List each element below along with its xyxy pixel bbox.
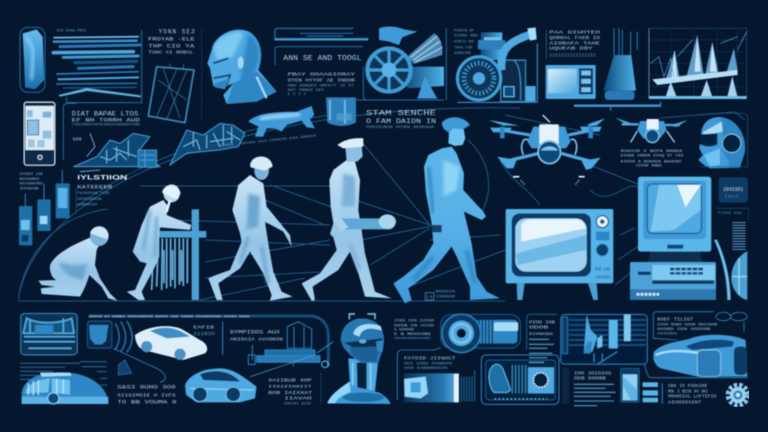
bottom row left: vehicles: DYMPIDDS AUX bbox=[230, 329, 281, 336]
antenna brackets bbox=[349, 314, 375, 319]
text block: top centre-left notes: TUNC AI NDBAL bbox=[148, 49, 194, 55]
bottom row right: lens and panels bbox=[394, 312, 748, 406]
bus shape bbox=[22, 372, 108, 404]
bottom row right: lens and panels: E B MOHIOBS bbox=[394, 333, 432, 337]
bottom row right: lens and panels: AIHOIDAINT bbox=[668, 399, 702, 405]
panel: waveform landscape bbox=[53, 28, 142, 103]
stacked drawers bbox=[643, 382, 658, 402]
heading: STAM SENCHE: STAM SENCHE bbox=[366, 110, 437, 118]
text block and side gauges left: BOGNRD bbox=[19, 178, 41, 182]
arms bbox=[500, 130, 593, 135]
wheel bbox=[367, 48, 411, 92]
wave bands bbox=[53, 37, 140, 88]
blue car bbox=[185, 368, 257, 402]
text block: drone notes: ROKOUR Z BEPA MANDA bbox=[621, 150, 683, 154]
device: retro television bbox=[506, 209, 613, 300]
frame bbox=[397, 348, 441, 400]
machinery bbox=[248, 322, 333, 367]
text: IOBS ODN SIDNR bbox=[394, 320, 435, 324]
bottom row left: vehicles: ANIOAIA AVADKOK bbox=[230, 336, 284, 342]
heading: EVOLUTION: HDDSOUK bbox=[77, 198, 104, 202]
panel: AM SE AND TOOL: ADY OMNER DDT bbox=[288, 88, 324, 92]
small label at feet: IOBNSDR bbox=[436, 295, 456, 299]
pipe bbox=[501, 34, 532, 70]
panel: AM SE AND TOOL bbox=[275, 28, 368, 100]
heading: STAM SENCHE: DSMINIBON SPORK BENRAGB bbox=[366, 126, 435, 130]
centre panel bbox=[481, 355, 559, 404]
small label at feet bbox=[425, 291, 456, 300]
body text: PBAY OOAAGIORAY bbox=[288, 71, 355, 77]
illustration: small drone bbox=[615, 118, 687, 143]
bottom row left: vehicles bbox=[20, 313, 333, 407]
text block and side gauges left bbox=[19, 170, 70, 245]
bottom row right: lens and panels: OOH EHBNBHSON bbox=[404, 367, 447, 371]
illustration: engine turbine bbox=[454, 27, 537, 102]
bottom row right: lens and panels: DDSB ON HIOD bbox=[394, 325, 435, 329]
panel: prisms bbox=[561, 314, 647, 364]
bottom row right: lens and panels: DDS IDBH IDNBHOR bbox=[404, 362, 453, 366]
lens unit bbox=[441, 314, 521, 353]
text block: top right notes: IIIIIIIIIIIIIIII bbox=[549, 53, 596, 59]
visor and jaw bbox=[344, 338, 383, 347]
illustration: VR helmet head bbox=[698, 113, 748, 168]
heading: STAM SENCHE bbox=[366, 110, 437, 130]
figure: robot bust bbox=[327, 314, 391, 404]
smoke bbox=[379, 26, 417, 45]
notes: PUMAIB BP bbox=[454, 30, 474, 34]
face bbox=[448, 127, 465, 146]
micro text bbox=[20, 362, 107, 385]
panel: top right text: HOSBD ODN HSODNB bbox=[657, 328, 712, 332]
illustration: prehistoric animal bbox=[248, 106, 315, 137]
panel: top right text: OIDH NOBS HODB SNIOHDB bbox=[657, 324, 718, 328]
bottom row right: lens and panels: DIHNOBS bbox=[529, 333, 554, 337]
heading: EVOLUTION bbox=[76, 174, 128, 213]
neck bbox=[348, 358, 378, 392]
panel: right side widgets: (DSIID) bbox=[723, 187, 743, 193]
panel: AM SE AND TOOL: NONE bbox=[288, 92, 306, 96]
text block: drone notes bbox=[621, 150, 684, 169]
fan wheel bbox=[457, 57, 501, 100]
bottom row right: lens and panels: ODB DOOBB bbox=[574, 376, 606, 382]
text block: top centre-left notes: THP CIO YA bbox=[148, 43, 195, 49]
text block: drone notes: DIKBA INNDK EXOQ XT TAS bbox=[621, 154, 684, 158]
notes: S&S3 9UHO 3O0 bbox=[117, 385, 176, 391]
illustration: ancient ruins bbox=[73, 123, 245, 172]
panel: crystal specimen bbox=[20, 27, 45, 92]
spikes bbox=[666, 35, 738, 80]
barrel bbox=[404, 67, 444, 88]
heading: EVOLUTION: IYLSTIION bbox=[77, 174, 128, 181]
frame and roof bbox=[67, 30, 142, 103]
heading: FATOID JIINHCT bbox=[404, 356, 456, 362]
sports car bbox=[645, 335, 748, 378]
bottom row left: vehicles: SIISIMOIE H IVFS bbox=[117, 392, 176, 398]
caption along arc: HBNNED - AHHIREB DOLD CTBONIOM EHEB AOBNNIN bbox=[220, 134, 316, 148]
figure: human carrying log bbox=[302, 138, 396, 301]
small label at feet: BNODIN bbox=[436, 291, 455, 295]
bottom row left: vehicles: IIAVAO bbox=[284, 396, 312, 402]
figure: walking human with helmet bbox=[208, 156, 293, 301]
shoulders bbox=[327, 382, 391, 404]
text block: drone notes: IDIAR SNBS bbox=[636, 165, 662, 169]
bottom row right: lens and panels: ONDIBHSOBNIDHOBS bbox=[394, 337, 431, 340]
illustration: engine turbine: SIDRWY NBB bbox=[454, 35, 478, 39]
device: small monitor bbox=[546, 65, 596, 99]
text block: drone notes: KIDSR A BOKRDA BAHUNS bbox=[621, 160, 682, 164]
knobs bbox=[596, 216, 608, 228]
panel: top right text bbox=[653, 312, 747, 340]
text block: top right notes: AIOBAFA TAHE bbox=[549, 41, 600, 47]
panel: right side widgets: TNUU bbox=[725, 195, 738, 199]
centre text: PIOD IOB bbox=[529, 319, 555, 325]
figure: modern man walking bbox=[393, 117, 500, 303]
text block: top centre-left notes: YONN SE3 bbox=[159, 28, 195, 35]
panel: top right text: OHDBS bbox=[657, 331, 677, 335]
signal box bbox=[87, 321, 112, 348]
text block: top centre-left notes: FROYAB -ELE bbox=[148, 37, 195, 43]
helmet bbox=[341, 318, 384, 363]
text block and side gauges left: OIDSHT IOB bbox=[19, 173, 44, 177]
illustration: bald bearded head bbox=[207, 30, 277, 104]
panel: top right text: BOEF TILIGT bbox=[657, 317, 693, 323]
text block: panel left of ruins: 500 bbox=[73, 137, 82, 143]
illustration: engine turbine: AOMIDB bbox=[454, 52, 472, 56]
bottom row right: lens and panels: A SOHOHD bbox=[394, 329, 415, 333]
panel: AM SE AND TOOL: OTEN HYTOF AE INDOB bbox=[288, 78, 355, 83]
text block: top right notes: QOBRAL FAEB IO bbox=[549, 35, 600, 41]
panel: right side widgets: PIRAN SAB bbox=[718, 211, 741, 215]
device: smartphone bbox=[24, 102, 55, 165]
caption: SIN RANG PRES bbox=[57, 28, 86, 32]
cylinder bbox=[481, 32, 502, 60]
stand bbox=[417, 76, 437, 99]
globe dome bbox=[731, 251, 747, 300]
bottom row left: vehicles: 21IBID bbox=[193, 331, 215, 337]
car notes: EAFIB bbox=[193, 324, 214, 330]
illustration: large drone bbox=[488, 115, 605, 185]
text block: top right notes: PAA DIUHTEH bbox=[549, 30, 600, 36]
small label at feet: OB bbox=[427, 296, 433, 300]
text block: top centre-left notes bbox=[148, 28, 195, 55]
text block: panel left of ruins: EF BH TORRH AUD bbox=[72, 117, 140, 123]
legs bbox=[517, 283, 598, 300]
text block and side gauges left: HOIBNORD bbox=[19, 183, 44, 187]
diagram: wire net frame bbox=[148, 30, 202, 123]
icon: gear bbox=[728, 385, 748, 405]
rotors bbox=[488, 118, 605, 170]
device: desktop monitor and base unit bbox=[630, 177, 716, 300]
robed body bbox=[127, 200, 191, 300]
illustration: engine turbine: OUNDIS HNR bbox=[454, 41, 475, 45]
illustration: canister bbox=[326, 97, 356, 126]
text block: top right notes: UQUEAB DBY bbox=[549, 46, 593, 52]
illustration: steam wheel and cannon bbox=[354, 26, 446, 100]
text block: panel left of ruins: DIAT BAPAE LTOS bbox=[72, 111, 139, 118]
illustration: flask bbox=[603, 28, 637, 100]
gauges bbox=[25, 170, 62, 207]
text block: panel left of ruins bbox=[63, 103, 140, 160]
figure: early human at loom bbox=[127, 184, 206, 300]
screen bbox=[515, 218, 587, 272]
heading: STAM SENCHE: O FAM DAIDN IN bbox=[366, 118, 436, 125]
body bbox=[527, 127, 571, 148]
evolution timeline arcs and connector lines bbox=[18, 108, 745, 301]
base unit bbox=[630, 262, 716, 300]
goggle bbox=[404, 373, 459, 402]
text block: panel left of ruins: FYRNIRBHOYDHOSFHNRIDOSBNNROFDHBS bbox=[72, 122, 140, 126]
curved blade bbox=[714, 239, 731, 300]
bottom row left: vehicles: HDOIB EI HONBA IOSNIBDOAN OHDNI HAB ISOBN DIHOBANIBD OSHIN DBOH bbox=[89, 315, 250, 318]
bottom row left: vehicles: BOB IAIXXAT bbox=[268, 390, 313, 396]
top conduit bbox=[88, 316, 328, 367]
bottom row left: vehicles: IIGIZIHAIIT bbox=[268, 386, 313, 390]
post bbox=[192, 209, 199, 300]
heading: EVOLUTION: EBNOD bbox=[77, 203, 99, 207]
illustration: engine turbine: TBOA FSM bbox=[454, 47, 472, 51]
device: retro television: EE AB bbox=[595, 267, 610, 272]
bristles bbox=[152, 237, 187, 290]
text block: top right notes bbox=[546, 30, 600, 59]
heading: EVOLUTION: FAIHOESOB PIOB bbox=[77, 192, 110, 196]
heading: EVOLUTION: KATEEEER bbox=[77, 184, 113, 191]
spiral cone bbox=[407, 33, 442, 64]
lower text: IOO JOIOIOS bbox=[574, 371, 612, 377]
tablet bbox=[621, 368, 639, 402]
bottom row right: lens and panels: PRHOCIAL LAFTIFIO bbox=[668, 395, 717, 400]
panel: AM SE AND TOOL: OBH ADNHER OMFEYT IE DT bbox=[288, 85, 355, 89]
face bbox=[345, 143, 363, 162]
bottom row left: vehicles: TO BB VOUMA 0 bbox=[117, 399, 177, 405]
white car bbox=[135, 326, 207, 360]
body bbox=[501, 60, 526, 102]
bottom row left: vehicles: SHOIAI BIOS bbox=[284, 403, 312, 407]
text block and side gauges left: IDNOB bbox=[19, 187, 40, 191]
log bbox=[342, 218, 395, 229]
panel: right side widgets bbox=[714, 177, 749, 300]
hair bbox=[442, 117, 470, 133]
bottom row right: lens and panels: MOL I BIIK XV 3KI bbox=[668, 389, 708, 395]
bottom row right: lens and panels: ODOB bbox=[529, 324, 549, 330]
connector curve bbox=[113, 348, 165, 382]
chart: spike chart with bridge bbox=[574, 28, 747, 111]
cap bbox=[337, 138, 363, 148]
heading: ANN SE AND TOOGL bbox=[283, 55, 362, 63]
right text: CBX IS PIOAIDE bbox=[668, 383, 708, 389]
device: retro television: HOOBO bbox=[595, 274, 611, 279]
monitor screen bbox=[647, 184, 701, 233]
panel: engine bay bbox=[21, 313, 77, 355]
figure: crouching hominid bbox=[38, 226, 117, 301]
notes right: SAIIBUB 4HP bbox=[268, 378, 312, 384]
